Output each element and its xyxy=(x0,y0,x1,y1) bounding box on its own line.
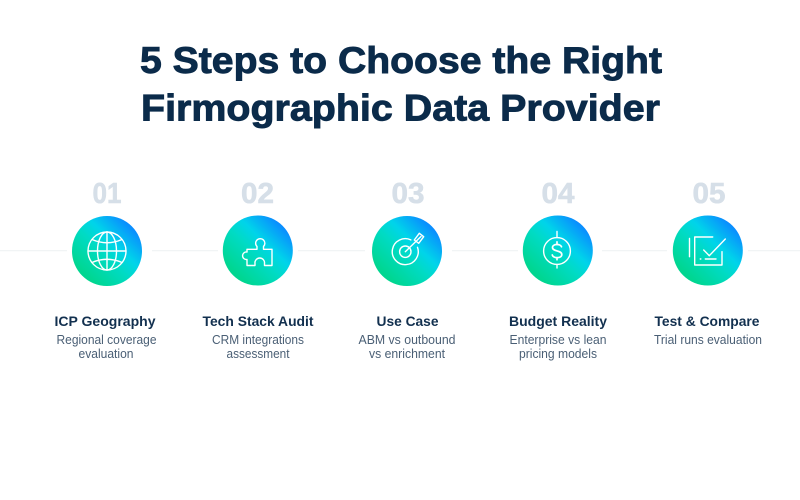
step heading: Use Case xyxy=(376,313,439,329)
step number 05: 05 xyxy=(692,178,726,210)
step description: CRM integrations xyxy=(212,333,304,347)
step heading: Test & Compare xyxy=(654,313,760,329)
step heading: ICP Geography xyxy=(54,313,156,329)
step 3: Use Case xyxy=(358,178,456,361)
step 2: Tech Stack Audit xyxy=(202,178,314,361)
title xyxy=(140,40,662,128)
title: Firmographic Data Provider xyxy=(141,88,660,128)
step 5: Test & Compare xyxy=(654,178,762,347)
step 4: Budget Reality xyxy=(509,178,607,361)
step description xyxy=(212,333,304,361)
step description: pricing models xyxy=(519,347,597,361)
step 1: ICP Geography xyxy=(54,178,157,361)
step description: Regional coverage xyxy=(56,333,157,347)
icon: puzzle piece xyxy=(223,216,293,286)
step number 03: 03 xyxy=(392,178,424,210)
step number 02: 02 xyxy=(241,178,274,210)
step number 01: 01 xyxy=(92,178,122,210)
title: 5 Steps to Choose the Right xyxy=(140,40,662,81)
icon: checklist document xyxy=(673,216,743,286)
step description: assessment xyxy=(226,347,290,361)
step description: ABM vs outbound xyxy=(358,333,456,347)
icon: target with arrow xyxy=(372,216,442,286)
step description xyxy=(358,333,456,361)
step description: vs enrichment xyxy=(369,347,446,361)
step description xyxy=(510,333,607,361)
icon: dollar coin xyxy=(523,216,593,286)
step heading: Budget Reality xyxy=(509,313,607,329)
step description xyxy=(56,333,157,361)
step number 04: 04 xyxy=(542,178,574,210)
step description: Enterprise vs lean xyxy=(510,333,607,347)
step description: Trial runs evaluation xyxy=(654,333,762,347)
step heading: Tech Stack Audit xyxy=(202,313,314,329)
step description: evaluation xyxy=(78,347,134,361)
icon: globe xyxy=(72,216,142,286)
